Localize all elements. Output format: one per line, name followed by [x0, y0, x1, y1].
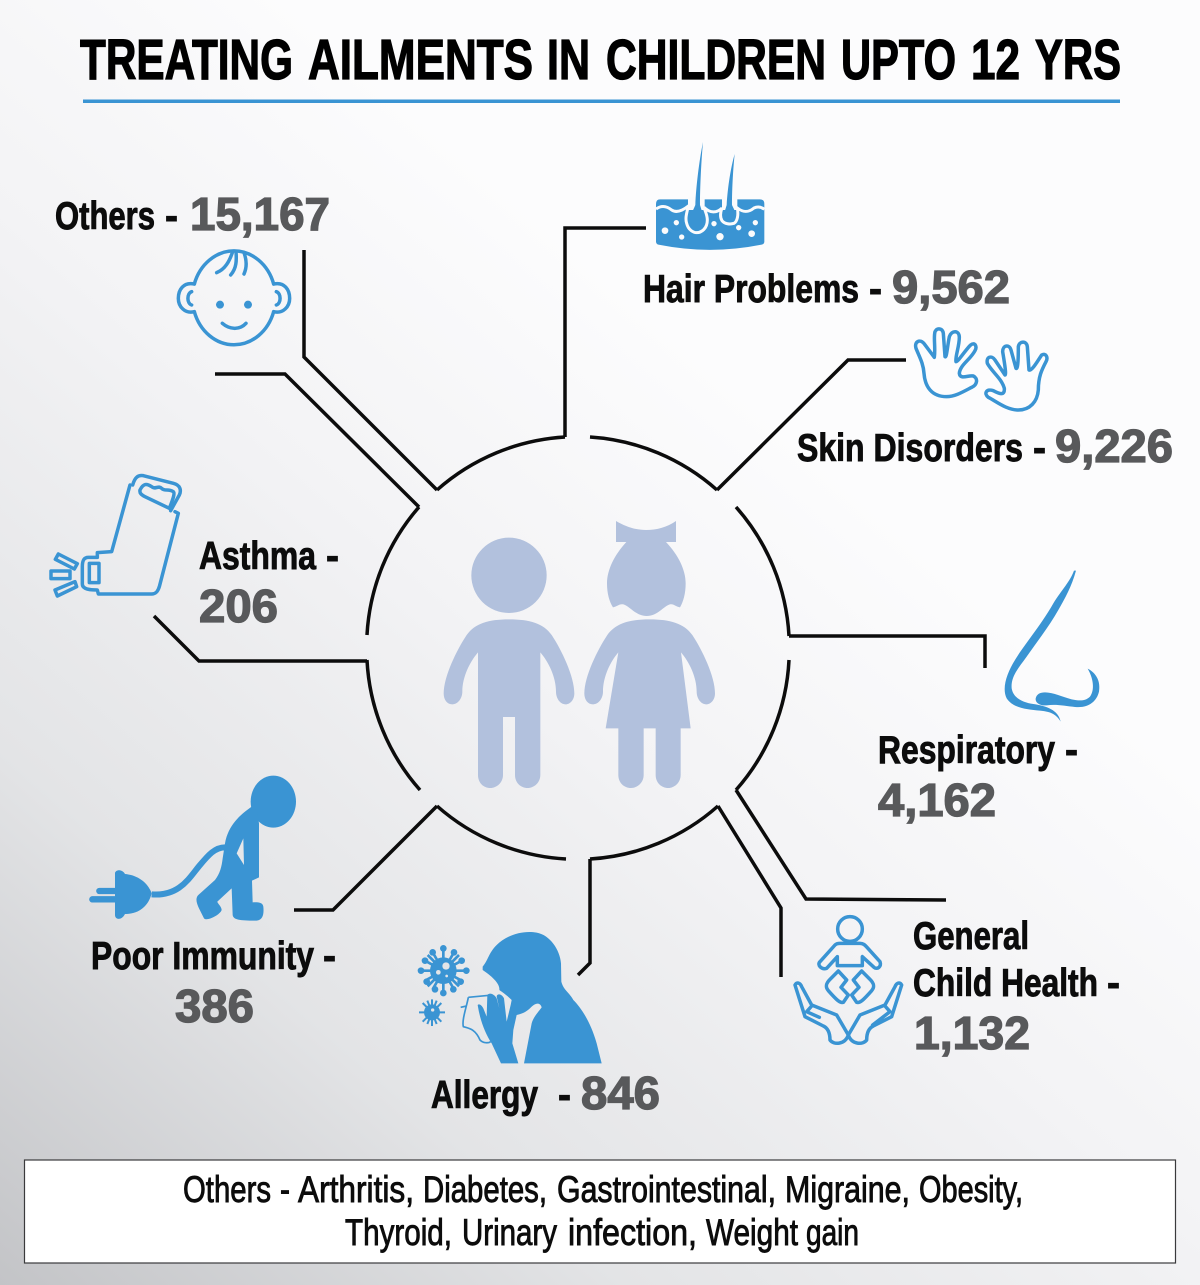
footnote box: Gastrointestinal, [557, 1169, 776, 1210]
icon: tired child with unplugged cord [92, 776, 296, 921]
label: general child health: - [1107, 962, 1120, 1005]
label: skin disorders: 9,226 [1055, 420, 1173, 472]
icon: inhaler [51, 476, 180, 596]
label: general child health: Child Health [913, 962, 1098, 1005]
label: others [55, 188, 330, 240]
footnote box: gain [806, 1212, 859, 1253]
title: TREATING [80, 28, 293, 92]
label: allergy: Allergy [431, 1074, 538, 1117]
footnote box: Migraine, [785, 1169, 910, 1210]
label: general child health [913, 915, 1120, 1059]
label: others: - [165, 195, 178, 238]
label: poor immunity [91, 935, 336, 1032]
footnote box: Weight [706, 1212, 799, 1253]
label: skin disorders [797, 420, 1173, 472]
label: allergy: 846 [581, 1067, 660, 1119]
central ring with connector lines [154, 228, 985, 977]
footnote box: Urinary [462, 1212, 557, 1253]
footnote box [24, 1160, 1176, 1263]
label: poor immunity: 386 [175, 980, 254, 1032]
label: hair problems: Hair Problems [643, 268, 859, 311]
icon: boy and girl silhouettes [444, 521, 715, 788]
label: respiratory: 4,162 [878, 774, 996, 826]
label: asthma [199, 535, 339, 632]
title: 12 [971, 28, 1020, 92]
label: hair problems: 9,562 [892, 261, 1010, 313]
icon: baby held in hands [795, 917, 902, 1043]
label: general child health: 1,132 [914, 1007, 1030, 1059]
icon: sneezing person with viruses [418, 932, 602, 1063]
label: allergy: - [558, 1074, 571, 1117]
title: CHILDREN [606, 28, 826, 92]
title: UPTO [841, 28, 956, 92]
title: IN [547, 28, 590, 92]
footnote box: - [280, 1169, 290, 1210]
label: asthma: - [326, 535, 339, 578]
label: allergy [431, 1067, 660, 1119]
label: respiratory [878, 729, 1078, 826]
label: skin disorders: Skin Disorders [797, 427, 1023, 470]
label: skin disorders: - [1033, 427, 1046, 470]
label: hair problems [643, 261, 1010, 313]
footnote box: Arthritis, [298, 1169, 414, 1210]
footnote box: Diabetes, [423, 1169, 547, 1210]
footnote box: infection, [568, 1212, 697, 1253]
label: others: 15,167 [190, 188, 330, 240]
label: asthma: 206 [199, 580, 278, 632]
label: hair problems: - [869, 268, 882, 311]
label: poor immunity: Poor Immunity [91, 935, 314, 978]
footnote box: Obesity, [919, 1169, 1023, 1210]
label: asthma: Asthma [199, 535, 316, 578]
footnote box: Thyroid, [345, 1212, 452, 1253]
icon: hair follicles in skin [656, 142, 764, 250]
title [80, 28, 1121, 103]
label: general child health: General [913, 915, 1029, 958]
footnote box: Others [183, 1169, 271, 1210]
label: poor immunity: - [323, 935, 336, 978]
label: respiratory: Respiratory [878, 729, 1055, 772]
title: AILMENTS [308, 28, 533, 92]
icon: two hands [916, 329, 1047, 410]
title: YRS [1035, 28, 1121, 92]
icon: baby face [178, 251, 290, 345]
icon: nose [1005, 571, 1099, 722]
label: respiratory: - [1065, 729, 1078, 772]
label: others: Others [55, 195, 155, 238]
